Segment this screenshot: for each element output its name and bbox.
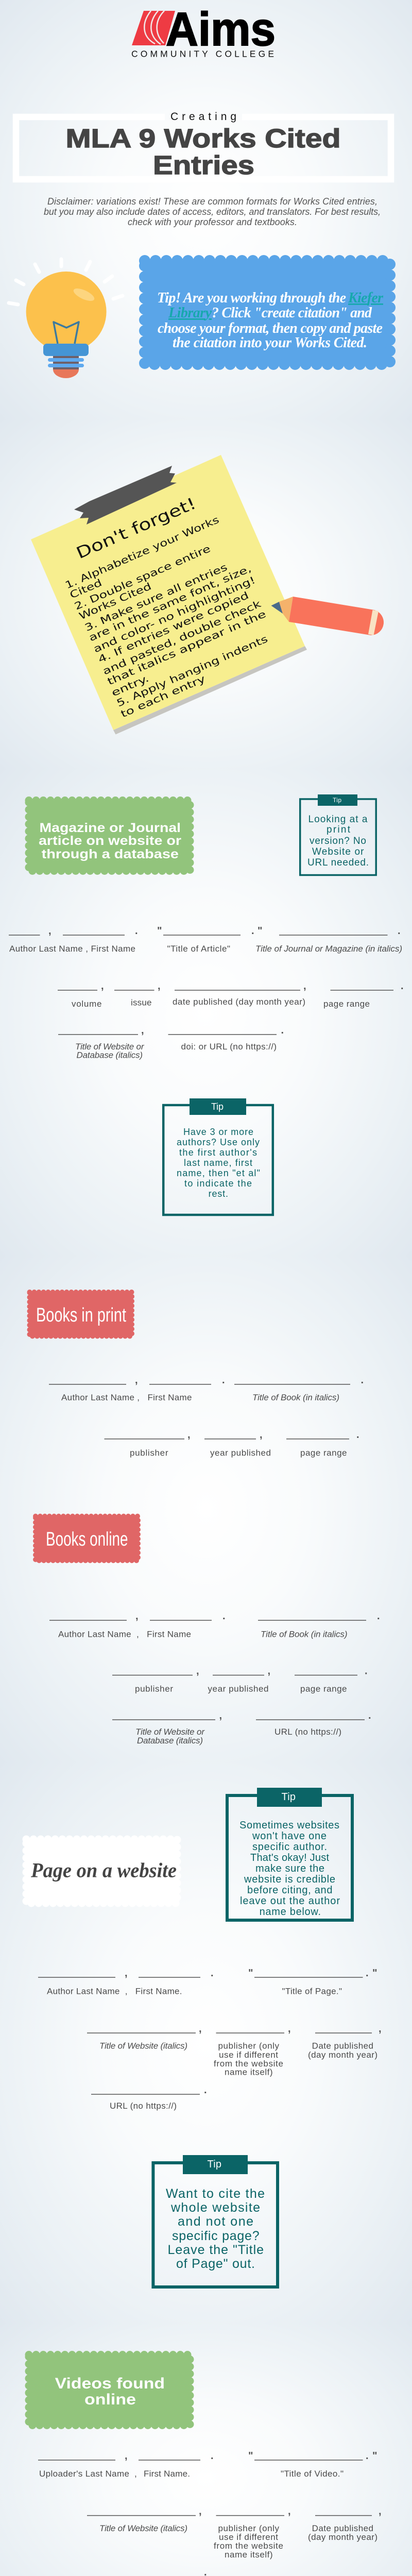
- citation: video row 2: [87, 2506, 382, 2560]
- logo: Aims Community College: Aims: [166, 3, 276, 56]
- citation: book online row 3: Title of Website or: [135, 1727, 205, 1737]
- citation: web page row 2: name itself): [225, 2067, 273, 2077]
- citation row 2: ,,,.: [101, 980, 404, 992]
- citation: book in print row 2: [104, 1429, 359, 1458]
- citation: video row 1: ,.".": [125, 2450, 377, 2462]
- sticky note: 2. Double space entire: [73, 543, 212, 613]
- citation: book in print row 2: page range: [300, 1448, 347, 1458]
- citation row 3: ,.: [141, 1025, 284, 1036]
- tip: whole website: Want to cite the: [166, 2187, 265, 2201]
- tip: no specific author: before citing, and: [247, 1885, 333, 1896]
- panel: don't forget checklist: [0, 419, 412, 769]
- tip: no specific author: [227, 1788, 352, 1920]
- citation: book online row 1: Author Last Name , First Name: [58, 1629, 191, 1639]
- citation: video row 2: use if different: [219, 2532, 278, 2542]
- citation: web page row 2: Title of Website (italics): [99, 2041, 187, 2050]
- tip: no specific author: specific author.: [252, 1841, 327, 1853]
- panel: videos: [0, 2324, 412, 2576]
- tip: no specific author: leave out the author: [240, 1895, 340, 1907]
- citation: web page row 1: "Title of Page.": [282, 1987, 342, 1996]
- citation: book in print row 1: Author Last Name , First Name: [61, 1393, 192, 1402]
- sticky note: that italics appear in the: [106, 608, 268, 688]
- citation: video row 2: publisher (only: [218, 2523, 279, 2533]
- sticky note: 3. Make sure all entries: [83, 562, 229, 634]
- citation: video row 1: ,: [134, 2469, 137, 2479]
- callout: library tip cloud: Library: [168, 305, 212, 321]
- panel: header and library tip: [0, 0, 412, 419]
- tip: whole website: whole website: [170, 2200, 260, 2215]
- tip: whole website: and not one: [178, 2214, 253, 2229]
- citation: book online row 2: year published: [208, 1684, 269, 1694]
- tip: three or more authors: Tip: [211, 1101, 224, 1112]
- sticky note: [31, 455, 307, 735]
- tip: print version: [300, 794, 376, 875]
- citation: web page row 2: from the website: [214, 2059, 283, 2069]
- citation: video row 1: First Name.: [144, 2469, 190, 2479]
- citation: web page row 1: [38, 1968, 377, 1996]
- tip: three or more authors: to indicate the: [184, 1178, 252, 1189]
- tip: print version: Website or: [312, 846, 364, 857]
- heading: page on a website: Page on a website: [30, 1859, 177, 1882]
- heading: books online: [36, 1516, 138, 1561]
- tip: whole website: Leave the "Title: [168, 2243, 264, 2257]
- citation: book online row 2: page range: [300, 1684, 347, 1694]
- panel: books: [0, 1256, 412, 1762]
- citation row 3: doi: or URL (no https://): [181, 1042, 277, 1052]
- tip: no specific author: website is credible: [244, 1874, 335, 1885]
- callout: library tip cloud: the citation into your Works Cited.: [173, 335, 367, 351]
- citation: web page row 3: .: [204, 2084, 207, 2096]
- citation: web page row 2: (day month year): [308, 2050, 377, 2060]
- citation: book in print row 1: Title of Book (in italics): [252, 1393, 339, 1402]
- citation: book online row 2: publisher: [135, 1684, 173, 1694]
- sticky note: Cited: [68, 577, 104, 601]
- tip: no specific author: Tip: [281, 1791, 296, 1803]
- citation row 2: volume: [72, 999, 102, 1009]
- citation: book online row 2: ,,.: [196, 1665, 368, 1676]
- heading: magazine or journal: [29, 801, 190, 871]
- kicker: Creating: Creating: [170, 111, 236, 123]
- sticky note: and pasted, double check: [101, 598, 263, 677]
- citation row 2: page range: [323, 999, 370, 1009]
- logo: Aims Community College: [131, 3, 276, 59]
- citation: video row 2: Date published: [312, 2523, 373, 2533]
- disclaimer: but you may also include dates of access, editors, and translators. For best results,: [44, 207, 381, 217]
- heading: books online: Books online: [46, 1529, 128, 1550]
- citation: book online row 3: URL (no https://): [274, 1727, 341, 1737]
- tip: no specific author: That's okay! Just: [250, 1852, 329, 1863]
- tip: three or more authors: [163, 1098, 273, 1215]
- logo: Aims Community College: COMMUNITY COLLEGE: [131, 48, 274, 59]
- tip: three or more authors: last name, first: [184, 1158, 252, 1168]
- citation: video row 2: Title of Website (italics): [99, 2523, 187, 2533]
- title: MLA 9 Works Cited: [66, 124, 341, 153]
- tip: print version: print: [327, 824, 351, 835]
- tip: print version: Tip: [333, 796, 341, 804]
- tip: three or more authors: Have 3 or more: [183, 1127, 253, 1137]
- tip: print version: Looking at a: [308, 814, 368, 825]
- citation: web page row 2: [87, 2023, 382, 2077]
- citation row 1: Author Last Name , First Name: [9, 944, 135, 954]
- citation: video row 2: (day month year): [308, 2532, 377, 2542]
- heading: magazine or journal: article on website or: [39, 834, 181, 848]
- citation: book in print row 1: [49, 1375, 364, 1402]
- sticky note: 4. If entries were copied: [96, 590, 250, 666]
- sticky note: to each entry: [119, 673, 207, 720]
- tip: whole website: of Page" out.: [176, 2257, 255, 2271]
- tip: no specific author: name below.: [260, 1906, 321, 1918]
- citation row 1: ,.".".: [48, 925, 401, 937]
- citation: web page row 2: ,,,: [199, 2023, 382, 2035]
- sticky note: entry.: [110, 673, 151, 699]
- citation row 1: "Title of Article": [167, 944, 230, 954]
- tip: print version: version? No: [310, 836, 366, 846]
- citation: book online row 3: [112, 1710, 371, 1745]
- citation row 2: issue: [131, 997, 151, 1008]
- tip: whole website: specific page?: [172, 2229, 260, 2243]
- citation: book online row 2: [112, 1665, 368, 1694]
- sticky note: Don't forget!: [74, 494, 199, 563]
- icon: pencil: [271, 597, 384, 635]
- tip: no specific author: won't have one: [252, 1831, 327, 1842]
- citation: book in print row 1: ,..: [135, 1375, 364, 1386]
- panel: page on a website: [0, 1762, 412, 2324]
- tip: three or more authors: the first author's: [179, 1147, 257, 1158]
- tip: no specific author: make sure the: [255, 1863, 324, 1874]
- callout: library tip cloud: choose your format, then copy and paste: [158, 320, 383, 336]
- heading: videos found online: online: [84, 2391, 136, 2408]
- tip: three or more authors: rest.: [209, 1189, 228, 1199]
- disclaimer: [44, 196, 381, 227]
- citation: book in print row 2: publisher: [130, 1448, 168, 1458]
- tip: three or more authors: name, then "et al": [177, 1168, 260, 1178]
- panel: magazine or journal article: [0, 769, 412, 1256]
- citation row 1: Title of Journal or Magazine (in italics): [255, 944, 402, 954]
- sticky note: and color- no highlighting!: [92, 574, 257, 655]
- citation row 3: [58, 1025, 284, 1060]
- tip: whole website: [153, 2155, 278, 2287]
- citation: web page row 1: Author Last Name , First Name.: [47, 1987, 182, 1996]
- citation: web page row 3: [91, 2084, 207, 2111]
- tip: print version: URL needed.: [307, 857, 369, 868]
- disclaimer: Disclaimer: variations exist! These are common formats for Works Cited entries,: [47, 196, 377, 207]
- citation: web page row 2: publisher (only: [218, 2041, 279, 2050]
- heading: videos found online: [29, 2354, 190, 2426]
- citation: book in print row 2: year published: [210, 1448, 271, 1458]
- sticky note: 5. Apply hanging indents: [115, 633, 269, 709]
- citation: book online row 3: ,.: [219, 1710, 371, 1721]
- heading: magazine or journal: Magazine or Journal: [39, 821, 181, 835]
- citation: book in print row 2: ,,.: [187, 1429, 359, 1440]
- tip: three or more authors: authors? Use only: [177, 1137, 260, 1147]
- citation: video row 1: "Title of Video.": [281, 2469, 344, 2479]
- callout: library tip cloud: Tip! Are you working through the: [157, 290, 346, 306]
- title: Entries: [153, 150, 254, 180]
- citation: video row 2: ,,,: [199, 2506, 382, 2517]
- citation: video row 1: Uploader's Last Name: [39, 2469, 129, 2479]
- citation: book online row 1: [49, 1611, 380, 1639]
- sticky note: Works Cited: [77, 581, 153, 622]
- citation: web page row 3: URL (no https://): [110, 2101, 177, 2111]
- callout: library tip cloud: Kiefer: [348, 290, 384, 306]
- disclaimer: check with your professor and textbooks.: [128, 217, 297, 227]
- heading: books in print: Books in print: [36, 1304, 126, 1326]
- citation: book online row 3: Database (italics): [137, 1736, 203, 1745]
- citation: web page row 2: Date published: [312, 2041, 373, 2050]
- callout: library tip cloud: [145, 261, 390, 364]
- title frame: [16, 117, 391, 179]
- citation: web page row 2: use if different: [219, 2050, 278, 2060]
- citation row 1: [9, 925, 402, 954]
- heading: magazine or journal: through a database: [42, 847, 179, 861]
- tip: whole website: Tip: [207, 2159, 221, 2170]
- tip: no specific author: Sometimes websites: [239, 1820, 339, 1831]
- heading: page on a website: [26, 1839, 177, 1903]
- citation row 3: Title of Website or: [75, 1042, 145, 1052]
- citation: video row 1: [38, 2450, 377, 2479]
- title: [66, 124, 341, 180]
- citation: book online row 1: ,..: [135, 1611, 380, 1622]
- sticky note: 1. Alphabetize your Works: [63, 514, 221, 591]
- citation row 3: Database (italics): [76, 1050, 143, 1060]
- icon: light bulb: [9, 259, 123, 378]
- sticky note: are in the same font, size,: [87, 563, 253, 644]
- citation: book online row 1: Title of Book (in italics): [261, 1629, 347, 1639]
- citation: video row 2: name itself): [225, 2550, 273, 2560]
- heading: videos found online: Videos found: [55, 2375, 165, 2392]
- callout: library tip cloud: ? Click "create citation" and: [212, 305, 372, 321]
- citation row 2: [58, 980, 404, 1009]
- citation: web page row 1: ,.".": [125, 1968, 377, 1979]
- heading: books in print: [30, 1292, 132, 1336]
- citation row 2: date published (day month year): [173, 997, 305, 1007]
- citation: video row 2: from the website: [214, 2541, 283, 2551]
